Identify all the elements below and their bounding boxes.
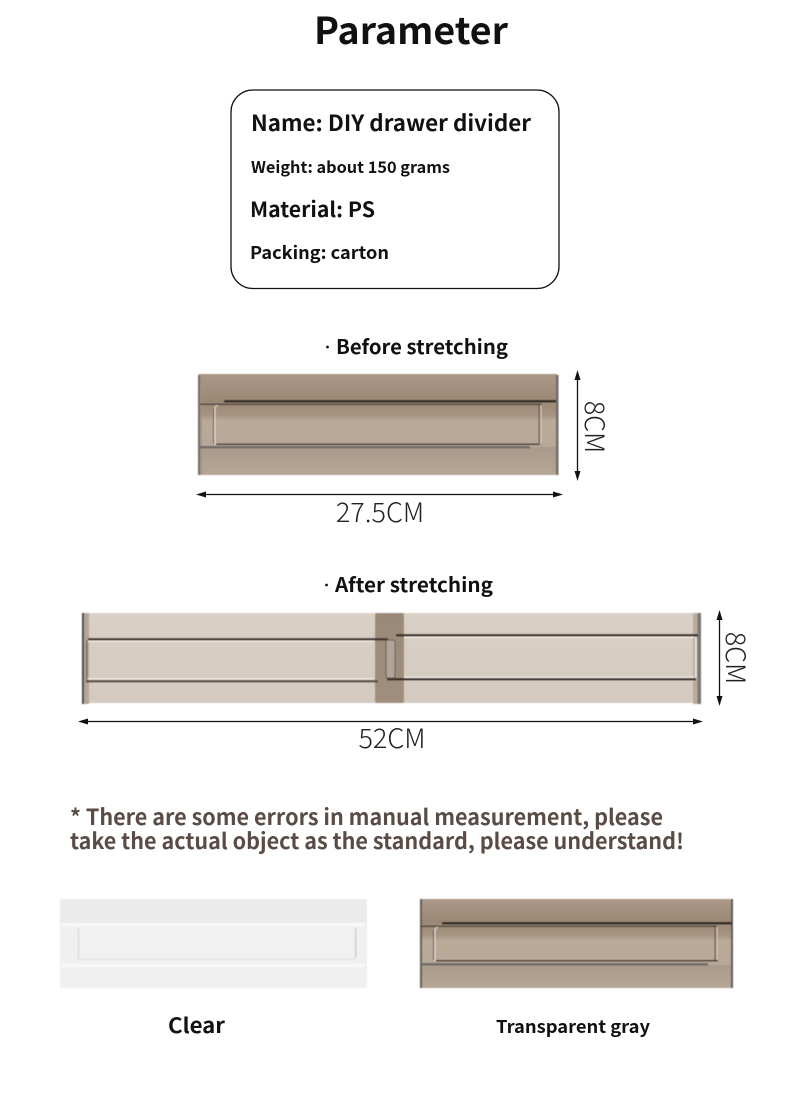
label: clear: Clear (168, 1010, 226, 1040)
panel: product specifications (231, 90, 559, 288)
dimension arrow: after height (716, 610, 722, 706)
dimension arrow: before width (196, 492, 563, 498)
measurement note: take the actual object as the standard, please understand! (70, 824, 684, 856)
heading: after stretching: After stretching (334, 569, 493, 598)
spec: weight: Weight: about 150 grams (251, 154, 450, 178)
photo: divider after stretching (82, 613, 701, 704)
dimension label: 8CM after: 8CM (718, 632, 757, 684)
photo: transparent gray divider (420, 899, 733, 988)
measurement note: * There are some errors in manual measurement, please (70, 800, 663, 832)
dimension label: 8CM before: 8CM (577, 401, 616, 453)
heading: before stretching: Before stretching (336, 331, 508, 360)
title: Parameter (314, 1, 509, 55)
spec: name: Name: DIY drawer divider (251, 106, 531, 138)
photo: divider before stretching (198, 374, 558, 475)
label: transparent gray: Transparent gray (496, 1014, 650, 1039)
photo: clear divider (60, 899, 367, 988)
spec: material: Material: PS (250, 194, 375, 224)
dimension label: 52CM: 52CM (358, 717, 426, 756)
spec: packing: Packing: carton (250, 240, 389, 265)
measurement note (70, 800, 684, 856)
dimension label: 27.5CM: 27.5CM (336, 491, 424, 530)
dimension arrow: after width (78, 718, 703, 724)
dimension arrow: before height (574, 370, 580, 481)
